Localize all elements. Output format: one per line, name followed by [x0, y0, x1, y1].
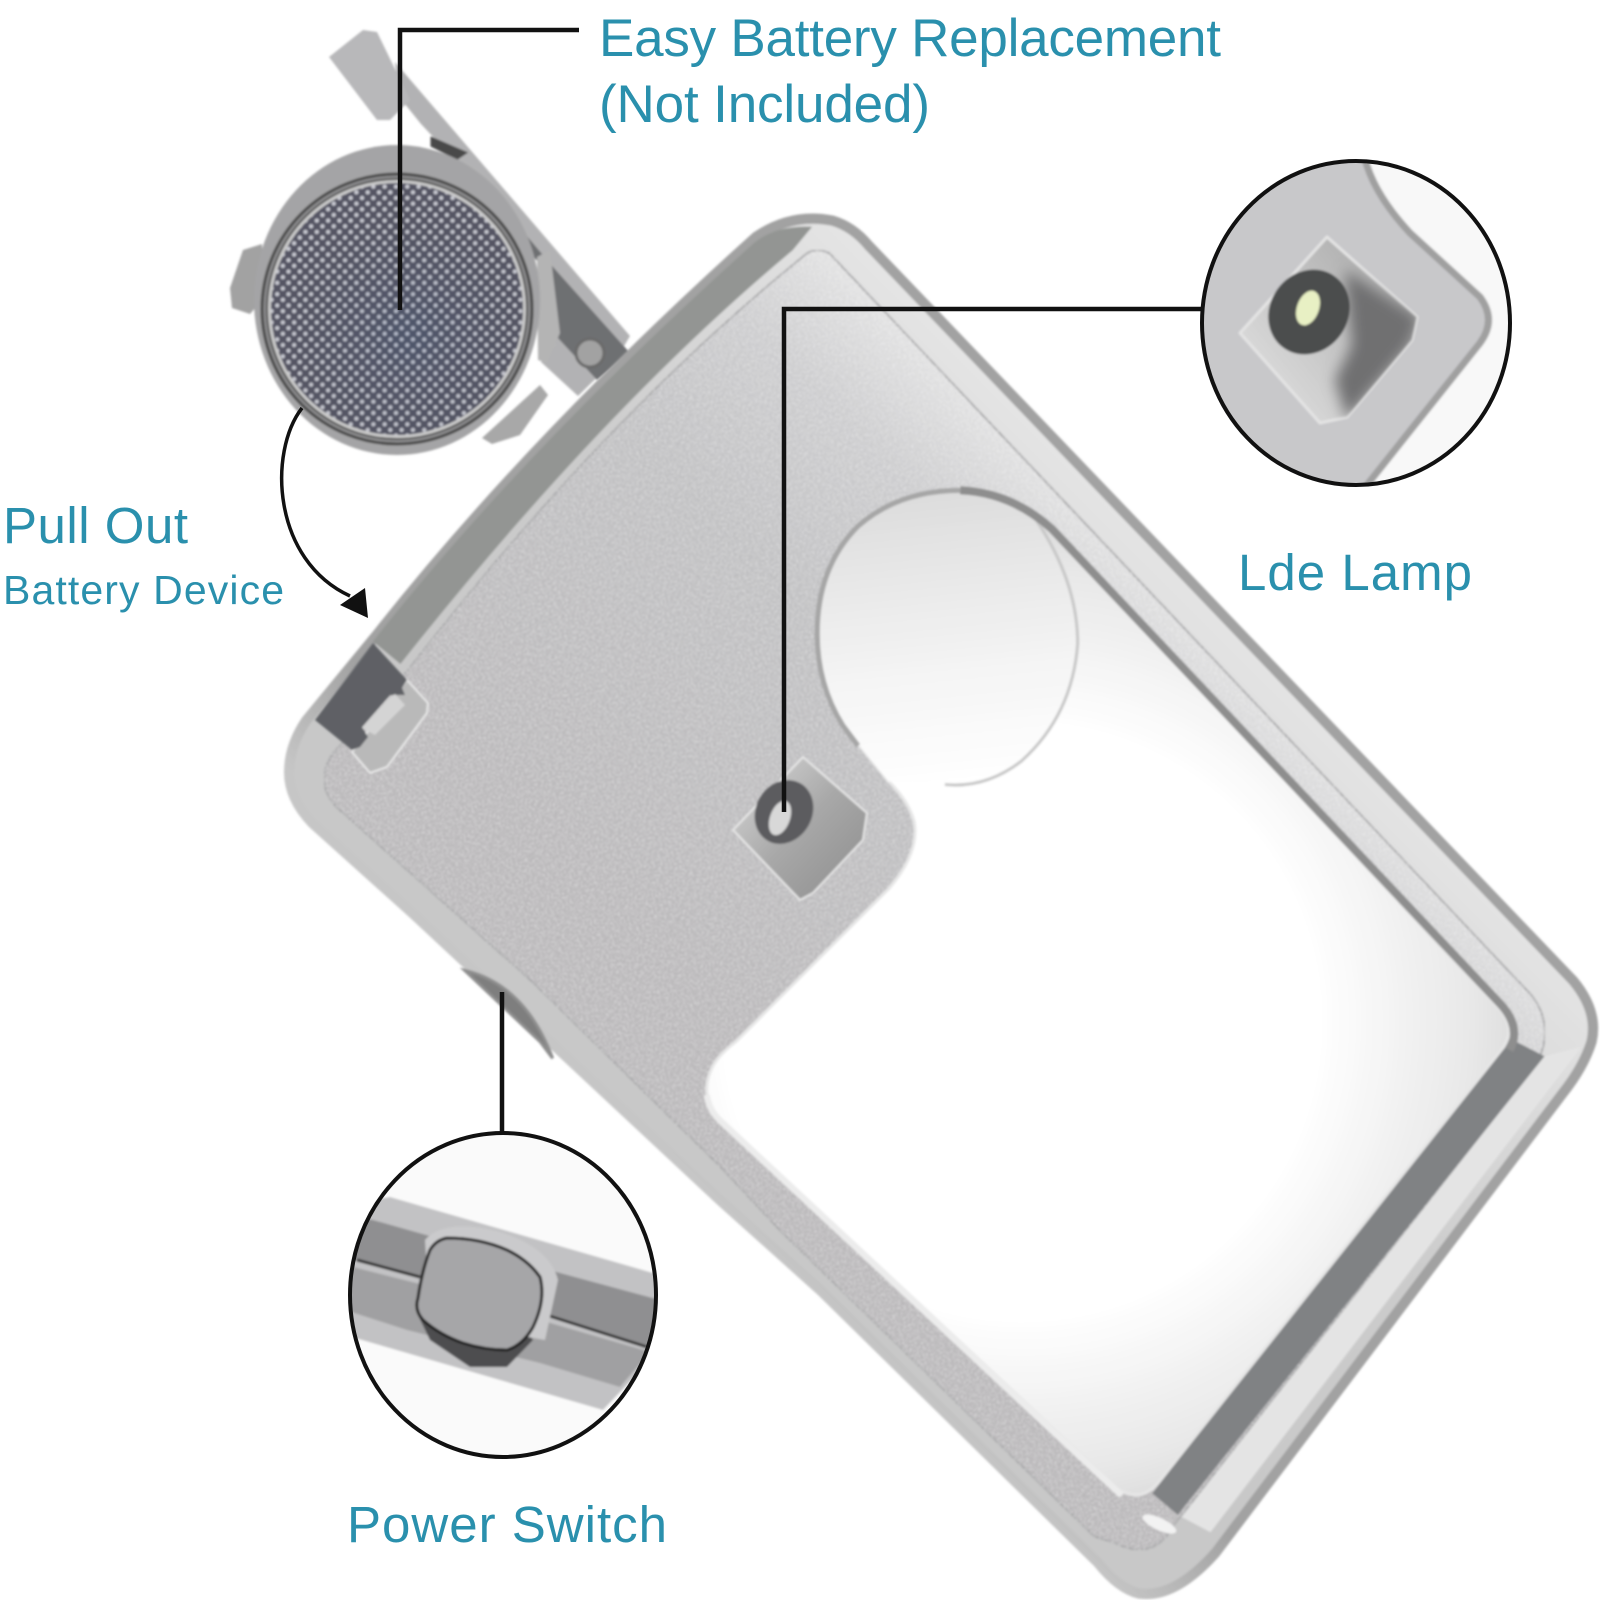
cell dotted face [271, 183, 523, 435]
lamp recess [733, 757, 867, 900]
switch button [417, 1238, 542, 1350]
switch inset background [340, 1130, 665, 1460]
arrow head [340, 588, 368, 618]
magnifier body [289, 219, 1593, 1594]
lens left bevel [817, 490, 960, 746]
cell edge highlight [267, 179, 527, 439]
leader line: power switch [500, 992, 504, 1133]
curved arrow: pull out [282, 408, 368, 618]
groove right [540, 1313, 647, 1347]
dark lower bevel [1152, 1037, 1545, 1515]
arrow curve [282, 408, 350, 596]
inset: power switch close-up [340, 1130, 665, 1460]
switch shadow [420, 1318, 534, 1368]
holder ring [254, 145, 540, 455]
switch inset content [352, 1196, 654, 1412]
switch housing [345, 1197, 660, 1410]
bracket shadow [477, 177, 630, 380]
label: easy battery replacement: Easy Battery Replacement [599, 9, 1221, 68]
left clips [230, 244, 262, 314]
groove left [357, 1260, 420, 1277]
body LED lamp [733, 757, 867, 900]
label: pull out: Pull Out [3, 497, 188, 554]
lamp inset content [1204, 163, 1494, 483]
battery door tab [315, 643, 428, 773]
door opening [315, 643, 407, 750]
glass lower left highlight [707, 1095, 1122, 1495]
round lens [817, 490, 1078, 785]
label: lde lamp: Lde Lamp [1238, 544, 1472, 601]
inset recess shadow [1335, 270, 1420, 420]
switch bezel [425, 1227, 558, 1340]
top left dark strip [373, 227, 812, 664]
lower dark face [345, 1265, 650, 1387]
cell rim [262, 174, 532, 444]
rivet [576, 339, 604, 367]
tab highlight [362, 694, 405, 735]
leader line: lamp [784, 309, 1202, 812]
inset background [1190, 155, 1520, 495]
label: not included: (Not Included) [599, 75, 930, 134]
cell blue tint [271, 183, 523, 435]
battery arm [395, 62, 630, 396]
face plate [324, 250, 1545, 1550]
corner glint [1140, 1511, 1179, 1537]
switch recess [465, 970, 553, 1058]
soft shadow [1335, 270, 1420, 420]
leader line: battery [400, 30, 579, 310]
inset LED bulb [1267, 268, 1351, 356]
glass upper right bevel [960, 490, 1514, 1050]
battery holder with coin cell [230, 30, 630, 455]
upper dark face [356, 1218, 654, 1346]
door tab plate [352, 680, 428, 773]
inset LED chip [1294, 288, 1322, 328]
label: battery device: Battery Device [3, 567, 284, 613]
lower clip [482, 385, 548, 444]
label: power switch: Power Switch [347, 1496, 667, 1553]
arm slot [433, 140, 463, 157]
inset: LED lamp close-up [1200, 159, 1512, 487]
inset face plate [1190, 150, 1488, 490]
inset recess [1240, 237, 1417, 423]
silver clip [537, 250, 560, 363]
outer rim [289, 219, 1593, 1594]
switch inset border [350, 1133, 656, 1457]
lens arc [945, 521, 1078, 785]
LED bulb [743, 769, 825, 855]
lamp inset border [1202, 161, 1510, 485]
magnifying glass window [707, 490, 1509, 1495]
light rim lower right [1178, 1047, 1581, 1532]
pull paddle [329, 30, 410, 120]
LED highlight [764, 798, 796, 838]
